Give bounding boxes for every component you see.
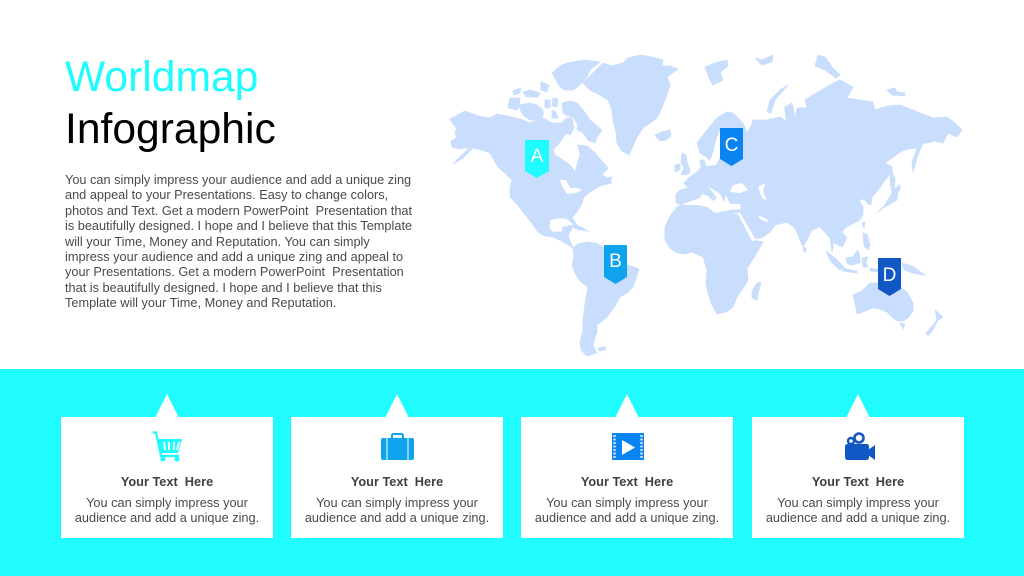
title: Infographic: Infographic: [65, 105, 276, 153]
map: Greenland: [583, 55, 678, 155]
pin D: D: [883, 265, 896, 286]
card 1 text: You can simply impress your: [86, 495, 248, 510]
card 4 heading: Your Text Here: [812, 474, 904, 488]
body text block: Template will your Time, Money and Reputation.: [65, 295, 336, 310]
map: Madagascar: [752, 282, 761, 300]
card 1 heading: Your Text Here: [121, 474, 213, 488]
map: Africa: [665, 203, 763, 314]
cyan band: [0, 369, 1024, 576]
card 2 text: [305, 495, 489, 525]
icon: briefcase: [381, 433, 414, 460]
icon: video film: [612, 433, 644, 460]
body text block: will your Time, Money and Reputation. You can simply: [65, 234, 370, 249]
card 3 text: [535, 495, 719, 525]
card 3 text: audience and add a unique zing.: [535, 510, 719, 525]
card 3 heading: Your Text Here: [581, 474, 673, 488]
body text block: [65, 172, 412, 310]
map: Australia: [853, 283, 913, 321]
card 4 text: audience and add a unique zing.: [766, 510, 950, 525]
pin D: [878, 258, 901, 296]
card 3 text: You can simply impress your: [546, 495, 708, 510]
card 1 text: audience and add a unique zing.: [75, 510, 259, 525]
map: Iceland: [655, 130, 671, 141]
map: Tasmania: [900, 323, 905, 329]
card 2 text: audience and add a unique zing.: [305, 510, 489, 525]
map: Arctic islands: [508, 60, 602, 143]
pin A: [525, 140, 549, 178]
pin B: B: [609, 251, 622, 272]
card 3 pointer: [616, 394, 638, 417]
pin A: A: [531, 146, 544, 167]
body text block: your Presentations. Get a modern PowerPoint Presentation: [65, 264, 404, 279]
card 2 heading: Your Text Here: [351, 474, 443, 488]
card 1: [61, 417, 273, 538]
card 3: [521, 417, 733, 538]
map: landmasses: [450, 55, 962, 356]
icon: movie camera: [845, 432, 875, 460]
icon: shopping cart: [152, 431, 182, 462]
map: North America: [450, 111, 612, 248]
pin C: [720, 128, 743, 166]
body text block: You can simply impress your audience and add a unique zing: [65, 172, 411, 187]
card 2 pointer: [386, 394, 408, 417]
map: inland seas and straits: [560, 130, 768, 241]
map: Tierra del Fuego: [598, 347, 606, 351]
card 1 text: [75, 495, 259, 525]
body text block: is beautifully designed. I hope and I believe that this Template: [65, 218, 412, 233]
title: Worldmap: Worldmap: [65, 53, 258, 101]
card 4 text: You can simply impress your: [777, 495, 939, 510]
card 4 text: [766, 495, 950, 525]
map: Asia-Pacific islands: [803, 167, 925, 275]
card 4: [752, 417, 964, 538]
map: South America: [572, 242, 639, 356]
map: Cuba: [568, 225, 590, 232]
card 4 pointer: [846, 394, 870, 417]
map: Newfoundland: [606, 177, 612, 184]
body text block: that is beautifully designed. I hope and I believe that this: [65, 280, 382, 295]
body text block: and appeal to your Presentations. Easy to change colors,: [65, 187, 388, 202]
map: Eurasia: [676, 80, 962, 252]
world map with location pins: [450, 54, 962, 356]
card 2 text: You can simply impress your: [316, 495, 478, 510]
pin B: [604, 245, 627, 284]
pin C: C: [725, 135, 738, 156]
map: Arctic Russia islands: [705, 55, 905, 113]
map: British Isles: [675, 153, 690, 175]
body text block: impress your audience and add a unique zing and appeal to: [65, 249, 403, 264]
card 2: [291, 417, 503, 538]
map: New Zealand: [926, 310, 943, 336]
body text block: photos and Text. Get a modern PowerPoint Presentation that: [65, 203, 412, 218]
card 1 pointer: [156, 394, 178, 417]
